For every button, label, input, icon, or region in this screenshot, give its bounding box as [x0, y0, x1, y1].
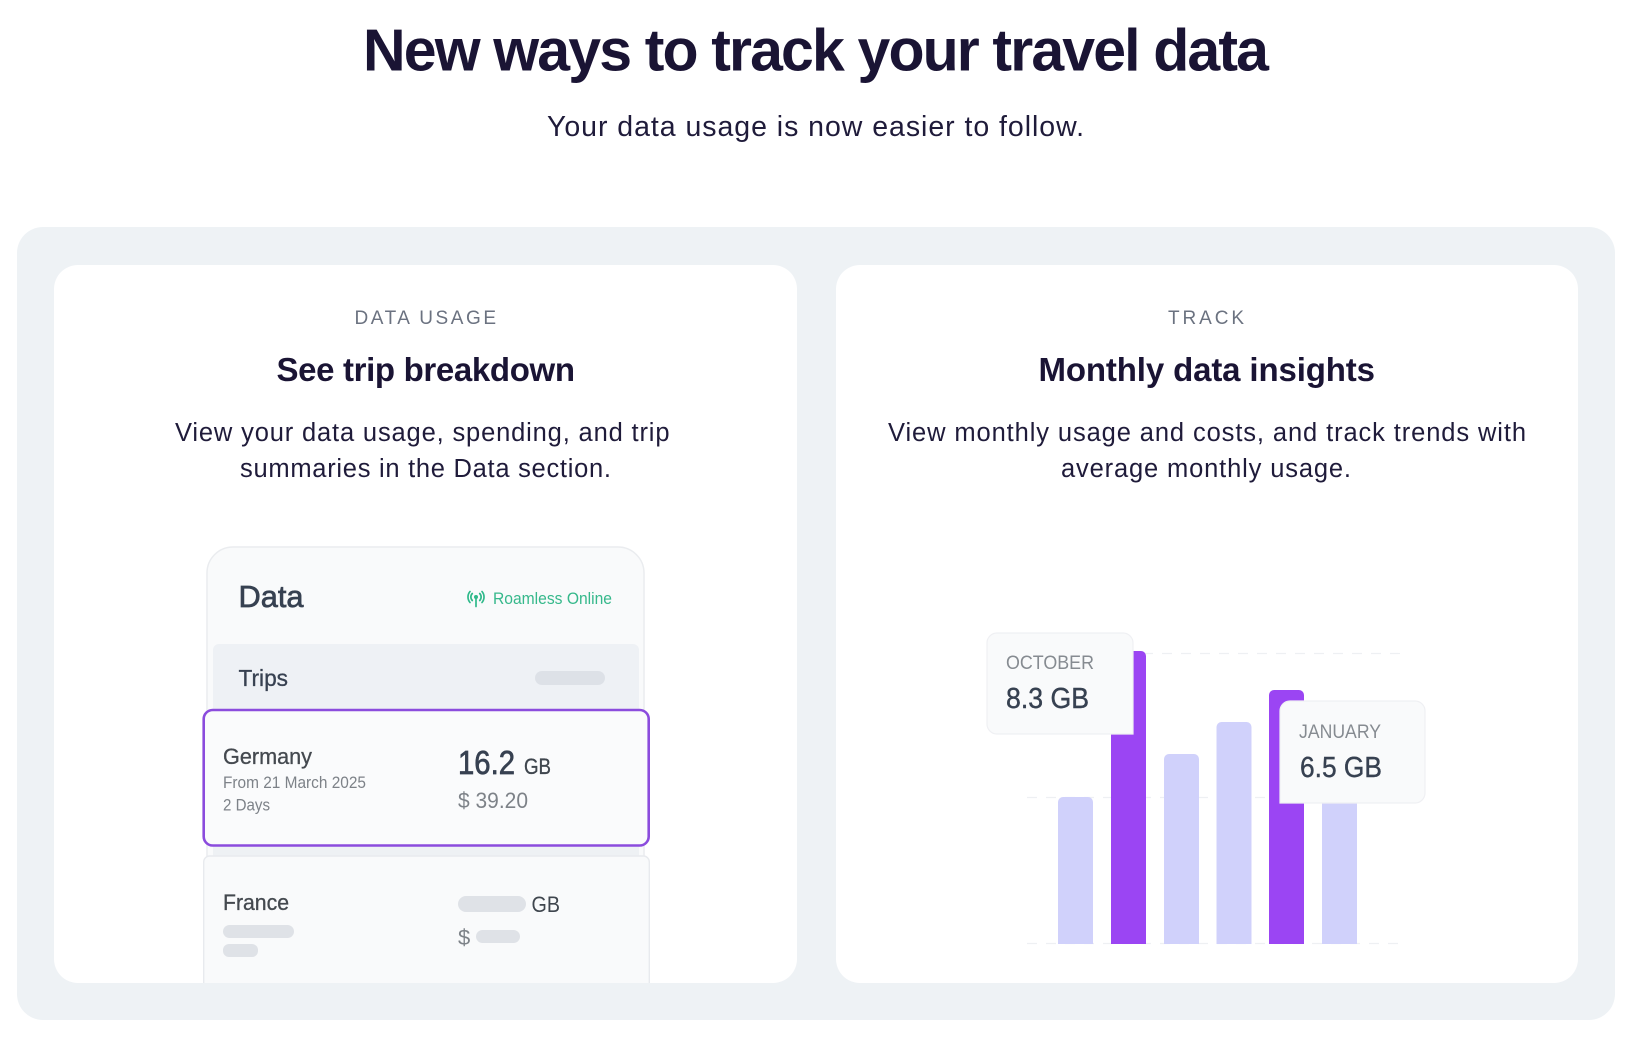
panel: data usage	[54, 265, 797, 983]
heading: monthly data insights: Monthly data insights	[1038, 351, 1375, 388]
heading: see trip breakdown: See trip breakdown	[276, 351, 575, 388]
tooltip: october: 8.3 GB	[1006, 683, 1089, 715]
tooltip: october: OCTOBER	[1006, 653, 1094, 674]
tooltip: january	[1280, 701, 1425, 803]
status: roamless online: Roamless Online	[493, 589, 612, 608]
card: germany: Germany	[223, 744, 312, 769]
bar: month 6	[1322, 797, 1357, 944]
description: data usage: summaries in the Data section.	[240, 455, 611, 483]
card: france: $	[458, 925, 470, 950]
card: germany: From 21 March 2025	[223, 774, 366, 792]
bar: month 3	[1164, 754, 1199, 944]
phone heading: data: Data	[238, 579, 304, 614]
description: track: average monthly usage.	[1061, 455, 1351, 483]
bar: october	[1111, 651, 1146, 944]
panel: track	[836, 265, 1578, 983]
trips band: Trips	[238, 665, 288, 691]
tooltip: january: 6.5 GB	[1300, 752, 1382, 784]
subtitle: Your data usage is now easier to follow.	[547, 111, 1084, 143]
phone mockup	[204, 547, 649, 983]
bar: january	[1269, 690, 1304, 944]
card: germany	[204, 710, 649, 846]
description: data usage: View your data usage, spending, and trip	[175, 419, 670, 447]
eyebrow: track: TRACK	[1168, 308, 1244, 329]
outer panel	[17, 227, 1615, 1020]
bar chart	[1027, 651, 1400, 944]
card: germany: 16.2	[458, 744, 515, 781]
description: data usage	[175, 419, 670, 483]
eyebrow: data usage: DATA USAGE	[354, 308, 496, 329]
card: france: France	[223, 890, 289, 915]
card: germany: 2 Days	[223, 796, 270, 814]
card: germany: GB	[524, 754, 551, 779]
card: germany: $ 39.20	[458, 788, 528, 813]
title: New ways to track your travel data	[363, 18, 1270, 84]
tooltip: october	[987, 633, 1133, 734]
gap band	[213, 846, 639, 858]
tooltip: january: JANUARY	[1299, 722, 1381, 743]
icon: signal antenna	[468, 592, 484, 606]
description: track: View monthly usage and costs, and track trends with	[888, 419, 1526, 447]
bar: month 4	[1216, 722, 1252, 944]
bar: month 1	[1058, 797, 1093, 944]
description: track	[888, 419, 1526, 483]
card: france: GB	[532, 892, 560, 917]
trips band	[213, 644, 639, 710]
card: france	[204, 856, 649, 983]
